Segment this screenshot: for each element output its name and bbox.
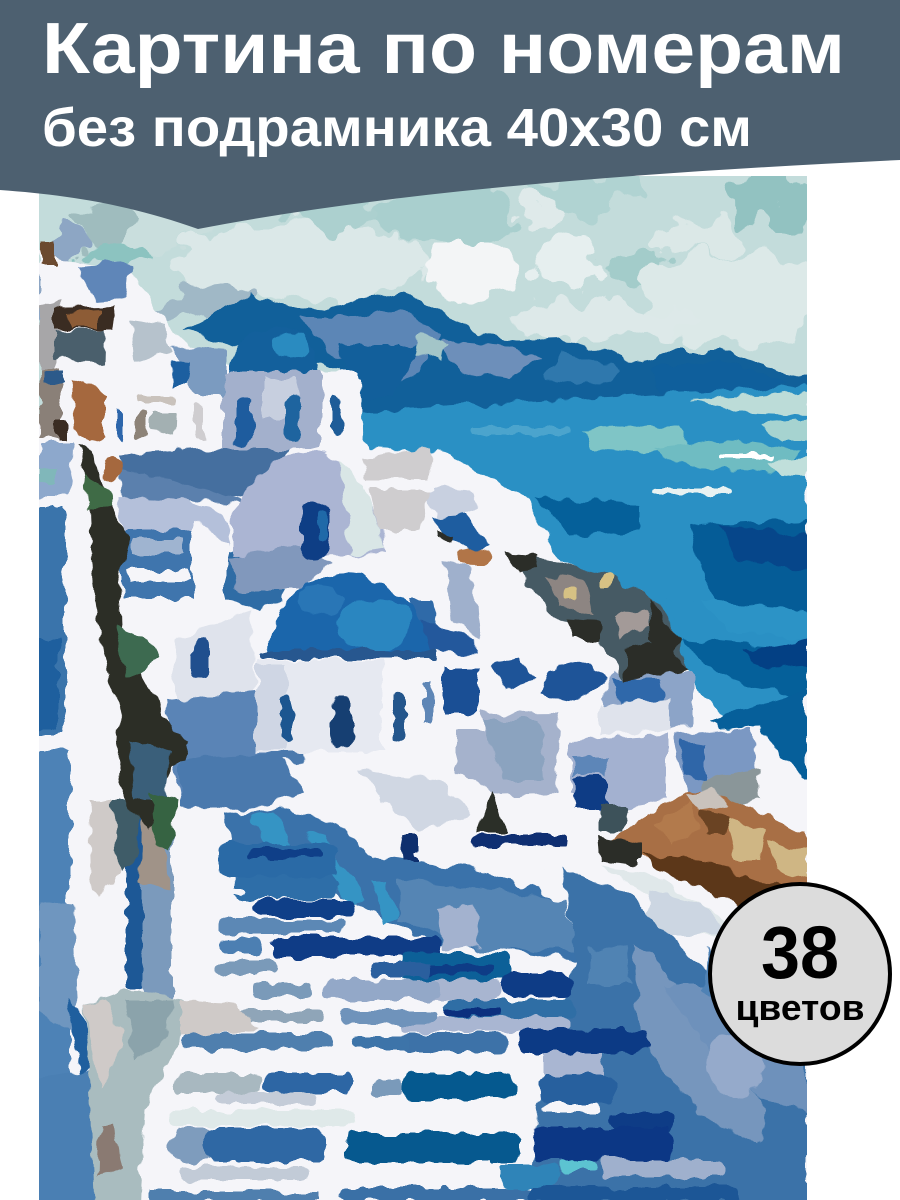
sea — [352, 385, 807, 810]
village: white terraces and shadows — [39, 250, 807, 832]
subtitle: без подрамника 40х30 см — [42, 98, 752, 158]
arched church — [226, 448, 434, 590]
scene — [30, 240, 807, 1200]
brown rocks lower right — [598, 790, 807, 945]
blue wall above stairs — [225, 807, 580, 960]
title: Картина по номерам — [42, 9, 845, 89]
stair stripes — [150, 843, 740, 1200]
lower right slope — [527, 868, 807, 1200]
sky with clouds — [39, 176, 807, 414]
rooftop details upper left — [41, 240, 106, 443]
left white column and wall — [30, 507, 260, 1200]
painting: Santorini seaside view — [20, 150, 830, 1200]
badge: 38 colours — [710, 884, 890, 1064]
small tree and figures on terrace — [408, 791, 568, 849]
distant mountains — [182, 292, 807, 412]
rocky cliff — [434, 515, 690, 682]
upper domed church — [222, 327, 358, 448]
badge: 38 colours: цветов — [736, 987, 864, 1028]
header banner — [0, 0, 900, 229]
large blue dome church — [192, 574, 482, 752]
badge: 38 colours: 38 — [761, 911, 839, 994]
climbing vine — [78, 447, 190, 850]
